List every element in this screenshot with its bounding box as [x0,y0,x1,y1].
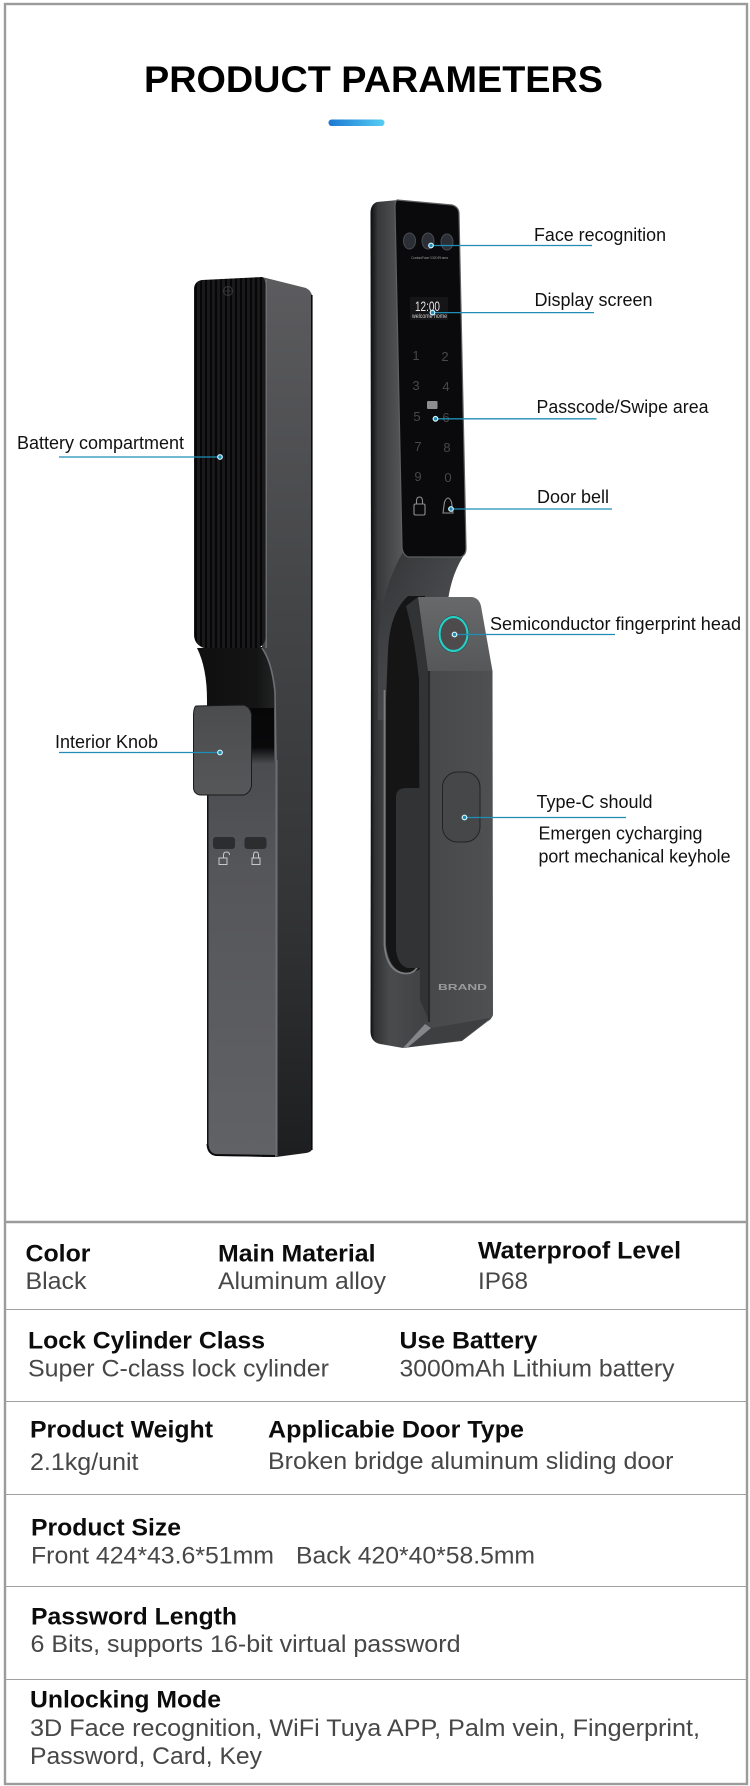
spec: applicable door type: Broken bridge aluminum sliding door [268,1448,674,1475]
spec: password length [30,1604,460,1658]
spec: waterproof level: IP68 [478,1268,528,1295]
lock rear: unlock icon [219,852,230,864]
lock: front panel [370,200,493,1048]
lock front: card icon [427,401,438,409]
spec: lock cylinder class [28,1328,329,1382]
spec: unlocking mode [30,1686,700,1770]
spec: product weight: 2.1kg/unit [30,1449,139,1476]
spec: use battery [400,1328,674,1382]
callout: passcode swipe area [433,397,709,421]
spec: product size: Back 420*40*58.5mm [296,1542,535,1570]
lock rear: knob shadow [250,708,274,764]
lock front: handle main [403,671,493,1048]
lock front: keypad: 1 [412,348,420,363]
lock front: black touch panel [395,200,466,557]
callout: type-c emergency charging port: Type-C should [536,792,652,812]
lock rear: lower plate [207,680,276,1157]
spec: applicable door type [268,1416,674,1475]
lock rear: neck [197,647,276,710]
lock rear: buttons [213,837,235,849]
lock front: handle top face [418,597,492,671]
lock front: keypad: 6 [442,410,450,425]
lock front: keypad: 2 [441,349,449,364]
lock front: neck [378,552,466,720]
lock front: top strip [370,200,404,620]
lock front: brand mark: BRAND [438,982,487,992]
callout: type-c emergency charging port [462,792,730,866]
spec: password length: 6 Bits, supports 16-bit virtual password [30,1631,460,1658]
lock front: display screen [410,297,448,320]
callout: interior knob [55,732,222,755]
lock front: keypad [412,348,452,485]
spec: main material [218,1240,386,1295]
callout: display screen [430,290,652,315]
spec: main material: Main Material [218,1240,376,1268]
lock: rear panel [194,277,313,1157]
lock front: keypad: 8 [443,440,451,455]
callout: passcode swipe area: Passcode/Swipe area [536,397,709,417]
spec: product weight [30,1416,213,1476]
title: PRODUCT PARAMETERS [144,59,603,100]
spec: color: Color [26,1240,90,1268]
spec: color: Black [26,1268,88,1295]
callout: door bell: Door bell [537,487,609,507]
spec: password length: Password Length [31,1604,237,1630]
lock rear: ribbed battery compartment [194,277,266,648]
lock front: keypad: 5 [413,409,421,424]
spec: waterproof level: Waterproof Level [478,1238,681,1264]
lock front: keypad: 3 [412,378,420,393]
spec: product size: Front 424*43.6*51mm [31,1542,274,1570]
callout: interior knob: Interior Knob [55,732,158,752]
callout: type-c emergency charging port: port mechanical keyhole [538,846,730,866]
lock front: keypad: 0 [444,470,452,485]
lock front: keypad: 7 [414,439,422,454]
callout: semiconductor fingerprint head: Semiconductor fingerprint head [490,614,741,634]
callout: face recognition: Face recognition [534,225,666,245]
callout: face recognition [429,225,666,248]
lock front: slot [386,596,425,973]
lock front: fingerprint sensor [438,616,469,652]
callout: type-c emergency charging port: Emergen cycharging [538,824,702,844]
spec: lock cylinder class: Super C-class lock cylinder [28,1356,329,1382]
spec: use battery: Use Battery [400,1328,538,1354]
spec: main material: Aluminum alloy [218,1268,386,1295]
lock front: keypad: 4 [442,379,450,394]
lock rear: lock icon [252,852,260,864]
spec: product size: Product Size [31,1514,181,1542]
lock front: small print: Contact Face 3 300 IR area [411,256,449,260]
spec: applicable door type: Applicabie Door Type [268,1416,524,1444]
callout: battery compartment: Battery compartment [17,433,184,453]
spec: color [26,1240,90,1295]
spec table rules [5,1222,747,1680]
lock front: keypad: 9 [414,469,422,484]
lock front: handle side [406,597,432,1023]
lock rear: interior knob [194,705,252,795]
lock rear: side strip [262,277,312,1157]
lock front: handle bottom facet [403,1018,490,1048]
lock front: camera lenses [404,233,453,250]
title accent bar [328,120,384,126]
spec: waterproof level [478,1238,681,1295]
lock front: lower body [370,600,435,1048]
callout: battery compartment [17,433,222,459]
lock front: star lock icon [414,497,425,515]
callout: door bell [449,487,612,511]
spec: use battery: 3000mAh Lithium battery [400,1356,674,1382]
lock front: display screen: 12:00 [415,299,440,314]
lock front: display screen: welcome home [411,313,447,320]
lock front: keyhole cover [442,772,480,842]
callout: display screen: Display screen [534,290,652,310]
lock front: inner grip [396,788,420,968]
spec: product size [31,1514,535,1570]
lock front: bell icon [443,498,453,513]
spec: unlocking mode: Unlocking Mode [30,1686,221,1714]
spec: unlocking mode: 3D Face recognition, WiFi Tuya APP, Palm vein, Fingerprint, [30,1715,700,1742]
spec: lock cylinder class: Lock Cylinder Class [28,1328,265,1354]
spec: unlocking mode: Password, Card, Key [30,1743,262,1770]
spec: product weight: Product Weight [30,1416,213,1444]
